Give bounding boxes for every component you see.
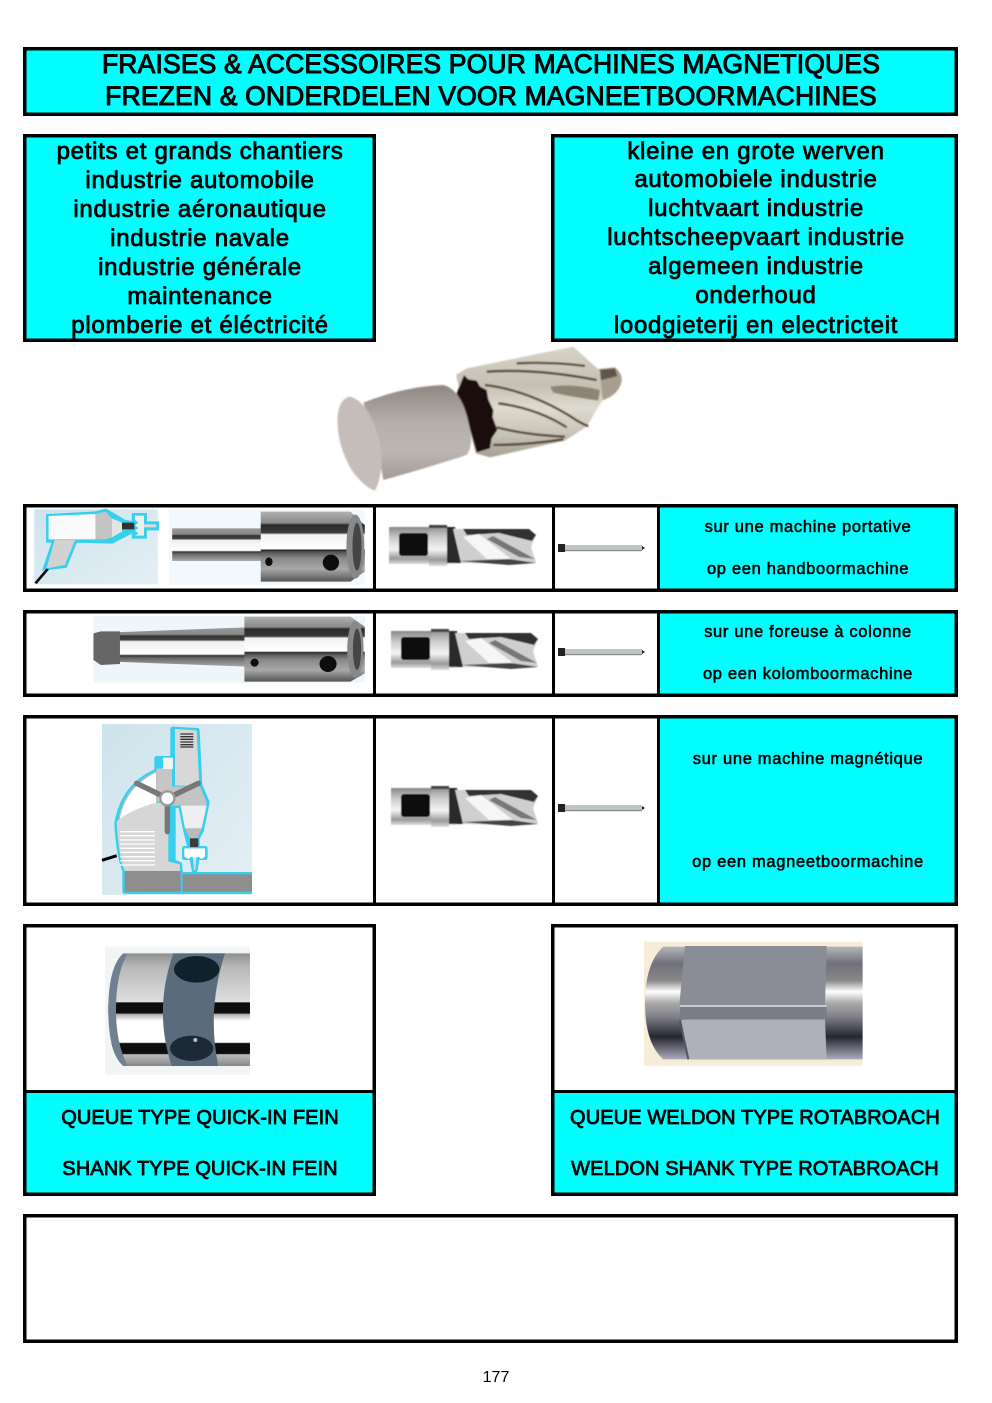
text block: magnetic machine labels: sur une machine magnétique bbox=[693, 750, 923, 768]
panel: Dutch applications list: automobiele industrie bbox=[634, 166, 878, 193]
text block: Weldon labels: QUEUE WELDON TYPE ROTABROACH bbox=[570, 1107, 940, 1129]
text block: Quick-In labels bbox=[25, 1090, 374, 1192]
text block: portable machine labels: sur une machine portative bbox=[705, 518, 911, 536]
text block: pillar drill labels: sur une foreuse à colonne bbox=[704, 623, 912, 641]
text block: magnetic machine labels: op een magneetboormachine bbox=[692, 853, 924, 871]
panel: French applications list bbox=[25, 136, 374, 340]
title banner: FREZEN & ONDERDELEN VOOR MAGNEETBOORMACHINES bbox=[105, 81, 877, 111]
image: annular cutter with slug bbox=[338, 347, 622, 491]
panel: Quick-In shank bbox=[25, 926, 374, 1194]
image: straight shank adapter bbox=[169, 510, 365, 585]
panel: Dutch applications list: luchtvaart industrie bbox=[648, 195, 864, 222]
panel: row magnetic machine bbox=[25, 716, 956, 905]
panel: French applications list: industrie navale bbox=[110, 225, 290, 252]
text block: Weldon labels: WELDON SHANK TYPE ROTABROACH bbox=[571, 1158, 939, 1180]
text block: Weldon labels bbox=[553, 1090, 956, 1192]
panel: row pillar drill bbox=[25, 611, 956, 696]
panel: empty notes box bbox=[25, 1216, 956, 1341]
panel: French applications list: plomberie et éléctricité bbox=[71, 312, 329, 339]
panel: Dutch applications list: loodgieterij en electricteit bbox=[614, 312, 898, 339]
panel: Dutch applications list: kleine en grote werven bbox=[627, 138, 885, 165]
panel: Dutch applications list: luchtscheepvaart industrie bbox=[607, 224, 905, 251]
icon: hand drill bbox=[34, 509, 158, 584]
icon: magnetic drill machine bbox=[102, 724, 263, 895]
panel: French applications list: industrie aéronautique bbox=[73, 196, 327, 223]
panel: Dutch applications list: algemeen industrie bbox=[648, 253, 864, 280]
text block: Quick-In labels: SHANK TYPE QUICK-IN FEIN bbox=[62, 1158, 338, 1180]
image: morse taper adapter bbox=[93, 616, 365, 683]
panel: row portable machine bbox=[25, 505, 956, 591]
panel: French applications list: maintenance bbox=[127, 283, 273, 310]
title banner: FRAISES & ACCESSOIRES POUR MACHINES MAGNETIQUES bbox=[102, 49, 880, 79]
panel: French applications list: petits et grands chantiers bbox=[57, 138, 343, 165]
panel: French applications list: industrie automobile bbox=[85, 167, 315, 194]
panel: Weldon shank bbox=[553, 926, 956, 1194]
image: Quick-In shank photo bbox=[105, 947, 250, 1075]
panel: Dutch applications list: onderhoud bbox=[695, 282, 817, 309]
text block: portable machine labels: op een handboormachine bbox=[707, 560, 909, 578]
text block: portable machine labels bbox=[660, 508, 954, 588]
text block: Quick-In labels: QUEUE TYPE QUICK-IN FEIN bbox=[61, 1107, 339, 1129]
title banner bbox=[25, 49, 956, 114]
page number: 177 bbox=[483, 1369, 509, 1386]
image: Weldon shank photo bbox=[644, 942, 863, 1066]
text block: pillar drill labels: op een kolomboormachine bbox=[703, 665, 913, 683]
panel: French applications list: industrie générale bbox=[98, 254, 302, 281]
text block: magnetic machine labels bbox=[660, 718, 954, 902]
text block: pillar drill labels bbox=[660, 614, 954, 694]
panel: Dutch applications list bbox=[553, 136, 956, 340]
